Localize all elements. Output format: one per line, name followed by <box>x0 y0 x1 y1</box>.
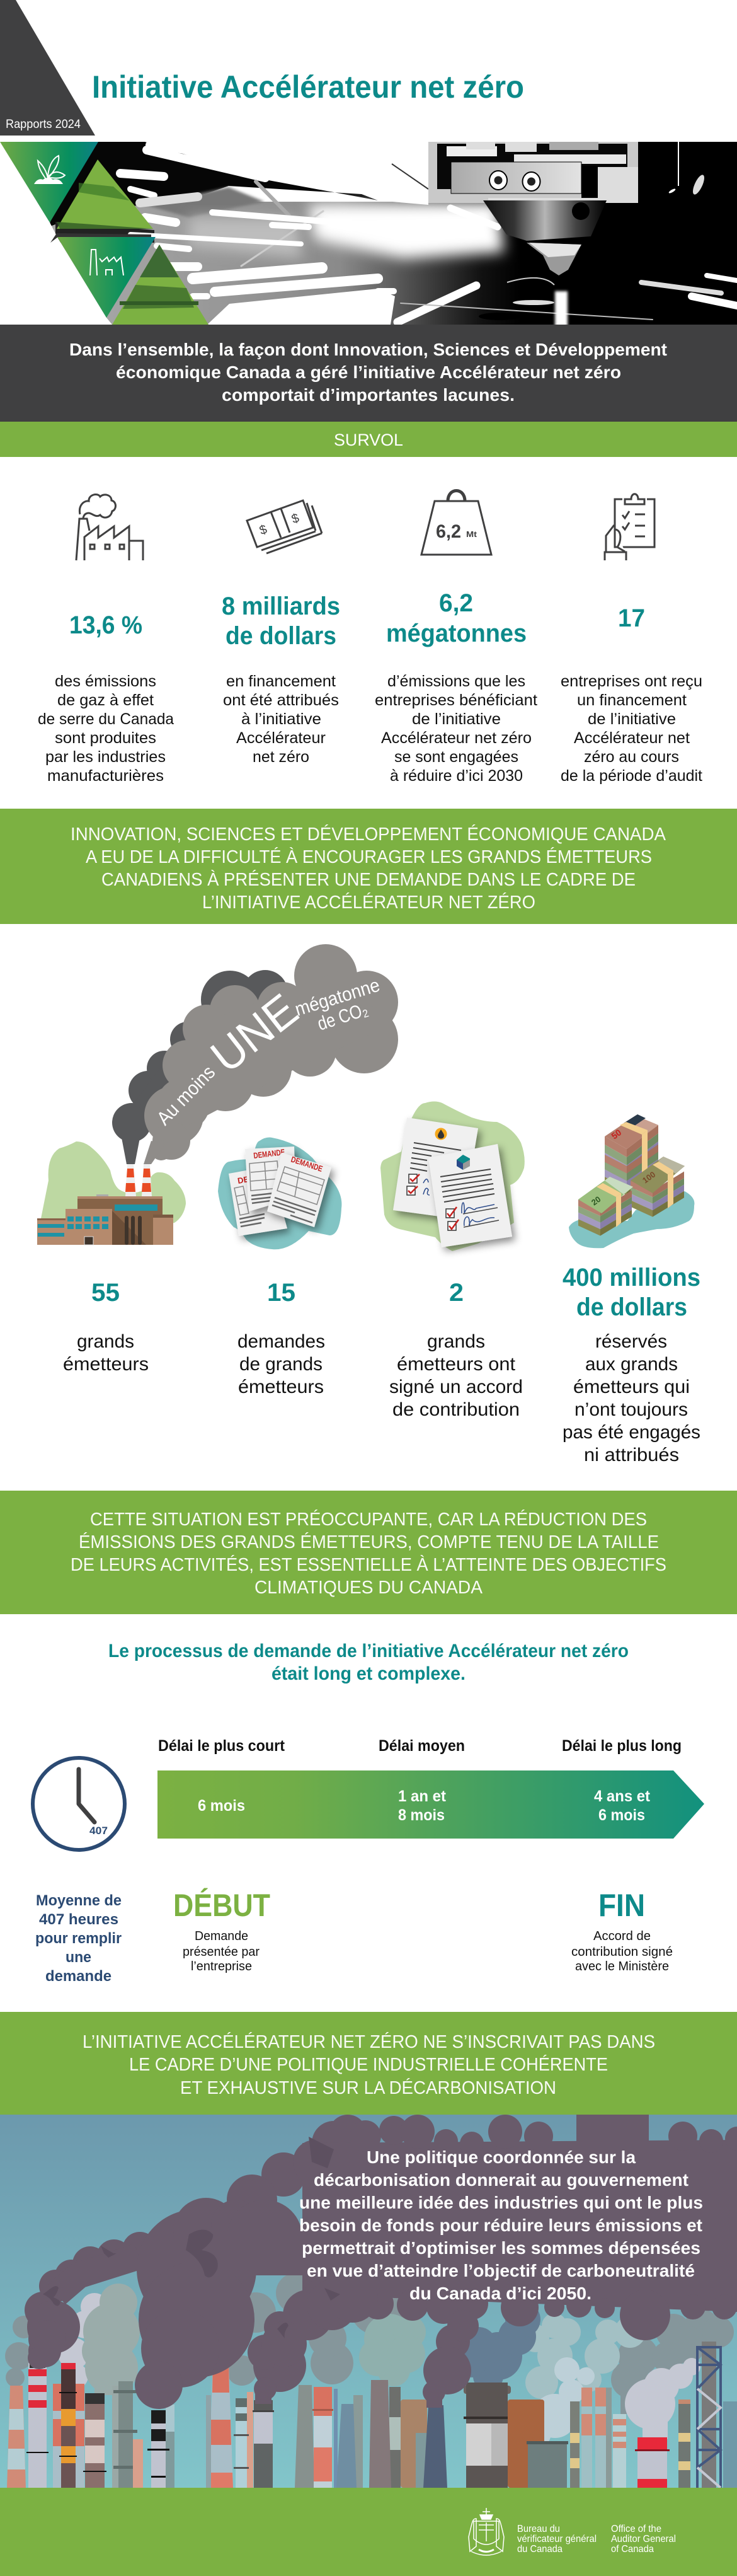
paper back <box>229 1166 287 1236</box>
green banner: concern: ÉMISSIONS DES GRANDS ÉMETTEURS, COMPTE TENU DE LA TAILLE <box>79 1532 659 1552</box>
light smoke cloud <box>144 944 398 1164</box>
cloud text: décarbonisation donnerait au gouvernement <box>314 2170 688 2190</box>
panel: agreements <box>380 1102 525 1420</box>
footer <box>0 2488 737 2576</box>
green banner: concern: CETTE SITUATION EST PRÉOCCUPANTE, CAR LA RÉDUCTION DES <box>90 1509 647 1530</box>
survol heading band <box>0 422 737 457</box>
panel: stat megatonnes <box>375 490 537 785</box>
stack of twenties: 20 <box>590 1194 602 1207</box>
blob <box>218 1138 341 1249</box>
panel: applications: 15 <box>267 1279 295 1307</box>
contract front <box>428 1144 512 1247</box>
label <box>389 1331 523 1420</box>
summary banner <box>0 325 737 422</box>
dark smoke <box>112 970 288 1164</box>
description: à réduire d’ici 2030 <box>390 767 523 785</box>
triangle icon: plant <box>0 142 98 222</box>
cloud text: Une politique coordonnée sur la <box>367 2147 636 2167</box>
icon: banknotes: $ <box>290 511 301 526</box>
label <box>563 1331 700 1465</box>
blob <box>569 1191 694 1248</box>
green banner: policy: ET EXHAUSTIVE SUR LA DÉCARBONISATION <box>180 2077 556 2098</box>
panel: money reserved: de dollars <box>576 1293 687 1321</box>
end label: FIN <box>598 1888 645 1923</box>
label: émetteurs <box>238 1377 324 1397</box>
icon: banknotes: $ <box>258 523 269 538</box>
icon: clock <box>33 1758 125 1850</box>
average hours text: demande <box>45 1968 111 1985</box>
chimneys right <box>369 2342 737 2488</box>
description: de l’initiative <box>412 710 501 728</box>
stack of fifties: 50 <box>609 1127 624 1141</box>
cloud text: du Canada d’ici 2050. <box>409 2284 591 2303</box>
header <box>0 0 524 136</box>
blob <box>380 1102 525 1251</box>
paper middle <box>245 1146 296 1211</box>
timeline arrow: 8 mois <box>398 1806 445 1824</box>
description: manufacturières <box>47 767 164 785</box>
institution names: du Canada <box>517 2544 563 2555</box>
description: entreprises ont reçu <box>561 673 702 690</box>
institution names: vérificateur général <box>517 2534 597 2544</box>
description: en financement <box>226 673 336 690</box>
description <box>223 673 339 766</box>
description: de la période d’audit <box>561 767 702 785</box>
panel: stat emissions <box>38 494 174 785</box>
green banner: ISDE difficulty: L’INITIATIVE ACCÉLÉRATEUR NET ZÉRO <box>202 892 535 913</box>
process heading: était long et complexe. <box>271 1663 466 1684</box>
description: zéro au cours <box>584 748 679 766</box>
start label: l’entreprise <box>191 1960 252 1973</box>
green banner: concern: CLIMATIQUES DU CANADA <box>254 1578 483 1598</box>
green banner: policy: LE CADRE D’UNE POLITIQUE INDUSTRIELLE COHÉRENTE <box>129 2054 608 2075</box>
label: grands <box>77 1331 134 1352</box>
cloud text <box>299 2147 703 2303</box>
label <box>237 1331 325 1397</box>
green banner: policy: L’INITIATIVE ACCÉLÉRATEUR NET ZÉRO NE S’INSCRIVAIT PAS DANS <box>83 2031 655 2052</box>
label: demandes <box>237 1331 325 1352</box>
panel: stat megatonnes: 6,2 <box>439 589 473 617</box>
timeline column labels: Délai le plus court <box>158 1737 285 1755</box>
label: de grands <box>239 1354 323 1375</box>
icon: coat of arms <box>469 2508 504 2555</box>
cloud text: une meilleure idée des industries qui ont le plus <box>299 2193 703 2212</box>
label: émetteurs ont <box>397 1354 516 1375</box>
panel: money reserved <box>563 1114 700 1465</box>
green banner: ISDE difficulty <box>0 809 737 924</box>
survol heading band: SURVOL <box>334 430 403 449</box>
average hours text <box>35 1892 122 1985</box>
description: de serre du Canada <box>38 710 174 728</box>
timeline arrow <box>157 1770 704 1839</box>
green banner: ISDE difficulty: CANADIENS À PRÉSENTER UNE DEMANDE DANS LE CADRE DE <box>101 869 636 890</box>
report tag triangle <box>0 0 95 136</box>
process heading: Le processus de demande de l’initiative Accélérateur net zéro <box>108 1641 629 1661</box>
panel: applications <box>218 1138 341 1397</box>
report tag triangle: Rapports 2024 <box>6 118 81 131</box>
description: un financement <box>577 691 687 709</box>
panel: stat funding <box>222 500 340 766</box>
building <box>37 1164 173 1245</box>
start label: Demande <box>195 1929 248 1943</box>
icon: weight: 6,2 <box>436 521 461 542</box>
triangle icon: factory <box>57 237 156 318</box>
green banner: policy <box>0 2012 737 2115</box>
icon: banknotes <box>247 500 322 553</box>
label: n’ont toujours <box>574 1399 688 1420</box>
summary banner: Dans l’ensemble, la façon dont Innovation, Sciences et Développement <box>69 340 667 359</box>
icon: weight: Mt <box>466 529 477 539</box>
description: de l’initiative <box>588 710 676 728</box>
timeline arrow: 4 ans et <box>594 1788 651 1805</box>
paper back: DE <box>237 1174 250 1186</box>
description: de gaz à effet <box>57 691 154 709</box>
timeline column labels <box>158 1737 682 1755</box>
stack of fifties <box>605 1114 658 1196</box>
description <box>375 673 537 785</box>
panel: money reserved: 400 millions <box>563 1264 700 1291</box>
cloud text: de CO₂ <box>315 999 370 1035</box>
cloud text: mégatonne <box>292 974 382 1020</box>
white left margin <box>0 202 112 325</box>
label <box>63 1331 149 1375</box>
icon: factory <box>76 494 143 560</box>
green banner: ISDE difficulty: A EU DE LA DIFFICULTÉ À ENCOURAGER LES GRANDS ÉMETTEURS <box>86 846 652 867</box>
green banner: concern: DE LEURS ACTIVITÉS, EST ESSENTIELLE À L’ATTEINTE DES OBJECTIFS <box>71 1554 666 1575</box>
description: Accélérateur net <box>574 729 690 747</box>
panel: agreements: 2 <box>449 1279 464 1307</box>
timeline arrow: 6 mois <box>598 1806 645 1824</box>
end label: avec le Ministère <box>575 1960 669 1973</box>
description <box>561 673 702 785</box>
end label <box>571 1888 673 1973</box>
institution names: of Canada <box>611 2544 654 2555</box>
label: pas été engagés <box>563 1422 700 1443</box>
panel: stat megatonnes: mégatonnes <box>386 620 527 647</box>
label: grands <box>427 1331 485 1352</box>
description: Accélérateur <box>236 729 326 747</box>
summary banner: économique Canada a géré l’initiative Accélérateur net zéro <box>116 362 621 382</box>
start label: présentée par <box>183 1945 260 1959</box>
timeline arrow: 6 mois <box>198 1797 245 1815</box>
institution names: Auditor General <box>611 2534 676 2544</box>
scene: smokestacks and cloud <box>0 2115 737 2488</box>
green banner: ISDE difficulty: INNOVATION, SCIENCES ET DÉVELOPPEMENT ÉCONOMIQUE CANADA <box>71 824 666 845</box>
average hours text: pour remplir <box>35 1930 122 1947</box>
light-green triangle overlays <box>57 159 153 229</box>
icon: weight <box>421 490 491 555</box>
contract back <box>393 1118 478 1220</box>
panel: stat funding: de dollars <box>226 622 336 650</box>
description: entreprises bénéficiant <box>375 691 537 709</box>
average hours text: une <box>66 1949 91 1966</box>
label: émetteurs qui <box>573 1377 690 1397</box>
average hours text: Moyenne de <box>36 1892 122 1909</box>
green banner: concern <box>0 1491 737 1614</box>
summary banner: comportait d’importantes lacunes. <box>222 385 515 405</box>
timeline column labels: Délai le plus long <box>562 1737 682 1755</box>
cloud text: UNE <box>202 984 307 1083</box>
description: ont été attribués <box>223 691 339 709</box>
chimneys left <box>7 2360 363 2488</box>
icon: clipboard and hand <box>605 494 654 560</box>
main dark cloud <box>25 2115 737 2409</box>
paper middle: DEMANDE <box>253 1147 285 1160</box>
title: Initiative Accélérateur net zéro <box>92 69 524 105</box>
hero photo: laser cutter and sparks <box>0 142 737 329</box>
start label <box>173 1888 270 1973</box>
start label: DÉBUT <box>173 1888 270 1923</box>
cloud text: permettrait d’optimiser les sommes dépensées <box>302 2238 700 2258</box>
description: des émissions <box>55 673 156 690</box>
description: se sont engagées <box>394 748 518 766</box>
average hours text: 407 heures <box>39 1911 118 1928</box>
label: émetteurs <box>63 1354 149 1375</box>
stack of hundreds <box>631 1157 685 1217</box>
panel: large emitters factory with smoke <box>37 944 398 1375</box>
stack of twenties <box>578 1177 633 1236</box>
cloud text: besoin de fonds pour réduire leurs émissions et <box>299 2215 702 2235</box>
blob <box>41 1141 186 1245</box>
cloud swirls <box>43 2137 340 2338</box>
paper front: DEMANDE <box>290 1155 324 1174</box>
background smoke <box>5 2269 734 2449</box>
label: ni attribués <box>584 1445 679 1465</box>
stack of hundreds: 100 <box>641 1170 657 1185</box>
timeline arrow: 1 an et <box>398 1788 447 1805</box>
cloud text <box>152 974 382 1129</box>
description: par les industries <box>45 748 166 766</box>
cloud text: en vue d’atteindre l’objectif de carboneutralité <box>307 2261 695 2280</box>
panel: stat emissions: 13,6 % <box>69 611 142 639</box>
panel: stat funding: 8 milliards <box>222 592 340 620</box>
description: à l’initiative <box>241 710 321 728</box>
panel: large emitters factory with smoke: 55 <box>91 1279 120 1307</box>
institution names: Bureau du <box>517 2524 560 2534</box>
description: Accélérateur net zéro <box>381 729 532 747</box>
panel: stat companies: 17 <box>618 604 645 632</box>
end label: Accord de <box>593 1929 651 1943</box>
label: de contribution <box>392 1399 520 1420</box>
description <box>38 673 174 785</box>
icon: clock: 407 <box>89 1825 108 1837</box>
cloud text: Au moins <box>152 1061 219 1129</box>
timeline column labels: Délai moyen <box>379 1737 465 1755</box>
institution names: Office of the <box>611 2524 661 2534</box>
label: réservés <box>595 1331 667 1352</box>
paper front <box>267 1153 331 1227</box>
institution names <box>517 2524 676 2555</box>
process heading <box>108 1641 629 1684</box>
end label: contribution signé <box>571 1945 673 1959</box>
description: net zéro <box>253 748 309 766</box>
label: signé un accord <box>389 1377 523 1397</box>
description: d’émissions que les <box>387 673 525 690</box>
description: sont produites <box>55 729 156 747</box>
panel: stat companies <box>561 494 702 785</box>
label: aux grands <box>585 1354 678 1375</box>
